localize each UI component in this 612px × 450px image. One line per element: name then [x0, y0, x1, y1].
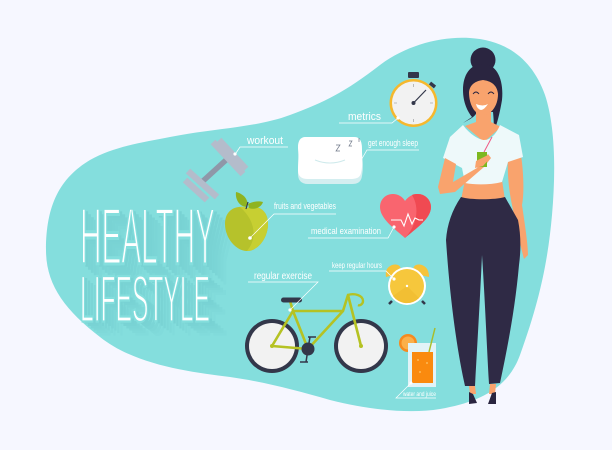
- title line: healthy: HEALTHY: [80, 191, 215, 281]
- icon: dumbbell: [185, 140, 246, 200]
- label: medical examination: medical examination: [311, 226, 381, 237]
- right arm: [508, 155, 528, 259]
- label: fruits and vegetables: [248, 201, 336, 240]
- woman figure: [438, 48, 528, 404]
- smile and eyes: [473, 92, 494, 110]
- icon: pillow with zzz: [298, 137, 363, 184]
- label: metrics: metrics: [348, 111, 381, 123]
- label: regular exercise: regular exercise: [254, 271, 312, 282]
- ankles: [469, 384, 496, 394]
- icon: bicycle: [245, 294, 388, 373]
- label: workout: [233, 135, 288, 156]
- white crop top: [443, 125, 523, 184]
- label: fruits and vegetables: fruits and vegetables: [274, 201, 336, 211]
- label: regular exercise: [248, 271, 318, 312]
- icon: heart with pulse: [380, 194, 431, 238]
- label: workout: workout: [246, 135, 283, 147]
- shoes: [469, 392, 496, 404]
- face: [469, 80, 498, 115]
- label: get enough sleep: [358, 138, 419, 165]
- icon: alarm clock: [386, 265, 429, 305]
- title: healthy lifestyle: [80, 191, 225, 335]
- green cup with straw: [475, 137, 492, 168]
- left arm holding cup: [438, 154, 491, 194]
- dark trousers: [446, 197, 520, 386]
- title line: lifestyle: LIFESTYLE: [80, 262, 210, 335]
- icon: stopwatch: [390, 72, 438, 127]
- label: get enough sleep: get enough sleep: [368, 138, 418, 148]
- hair back and bun: [463, 48, 502, 134]
- label: water and juice: water and juice: [402, 391, 436, 398]
- neck: [465, 108, 501, 142]
- label: metrics: [339, 111, 400, 123]
- icon: glass of juice: [399, 328, 436, 387]
- label: keep regular hours: [329, 260, 396, 281]
- icon: green apple: [225, 192, 268, 251]
- midriff: [461, 180, 505, 200]
- label: water and juice: [396, 382, 436, 398]
- label: keep regular hours: keep regular hours: [332, 260, 382, 270]
